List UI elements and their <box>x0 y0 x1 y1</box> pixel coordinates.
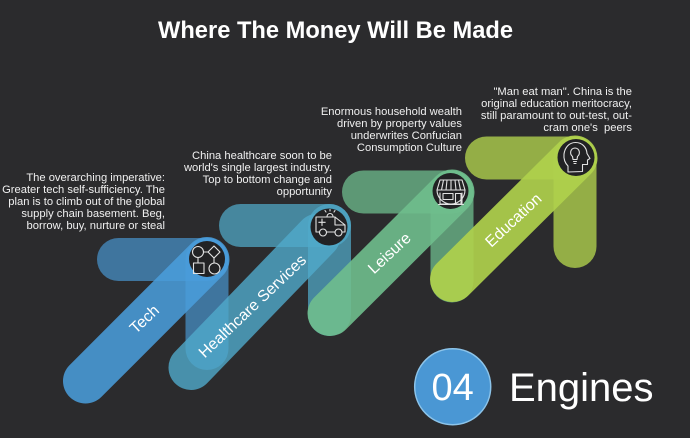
text: tech description: borrow, buy, nurture or steal <box>27 220 165 232</box>
text: healthcare description: opportunity <box>277 186 332 198</box>
text: education description: still paramount to out-test, out- <box>481 110 632 122</box>
icon: head with lightbulb <box>558 139 594 176</box>
text: education description: "Man eat man". China is the <box>493 86 632 98</box>
icon: process shapes <box>189 241 225 277</box>
text: leisure description: Enormous household wealth <box>321 106 462 118</box>
arrow: leisure <box>330 192 452 314</box>
label: education: Education <box>482 191 545 251</box>
heading: engines: Engines <box>509 366 654 410</box>
arrow: healthcare services <box>191 226 330 368</box>
text: education description: original education meritocracy, <box>481 98 632 110</box>
text: leisure description: driven by property values <box>337 118 462 130</box>
text: healthcare description: Top to bottom change and <box>203 174 332 186</box>
text: leisure description: underwrites Confucian <box>351 130 462 142</box>
icon: ambulance <box>310 208 348 246</box>
badge: 04: 04 <box>432 367 474 409</box>
text: tech description: Greater tech self-sufficiency. The <box>2 184 165 196</box>
label: leisure: Leisure <box>365 230 415 278</box>
text: education description <box>481 86 632 134</box>
text: healthcare description: world's single largest industry. <box>183 162 332 174</box>
text: tech description: The overarching imperative: <box>26 172 165 184</box>
text: healthcare description: China healthcare soon to be <box>192 150 332 162</box>
text: tech description: plan is to climb out of the global <box>8 196 165 208</box>
label: tech: Tech <box>127 302 163 337</box>
title: Where The Money Will Be Made <box>158 17 513 44</box>
arrow: education <box>452 158 575 280</box>
text: tech description: supply chain basement. Beg, <box>21 208 165 220</box>
text: tech description <box>2 172 165 232</box>
arrow: tech <box>86 260 207 381</box>
text: healthcare description <box>183 150 332 198</box>
text: leisure description: Consumption Culture <box>357 142 462 154</box>
text: leisure description <box>321 106 462 154</box>
icon: storefront <box>432 173 468 209</box>
label: healthcare services: Healthcare Services <box>196 252 310 362</box>
badge: 04 <box>415 349 491 425</box>
text: education description: cram one's peers <box>543 122 632 134</box>
